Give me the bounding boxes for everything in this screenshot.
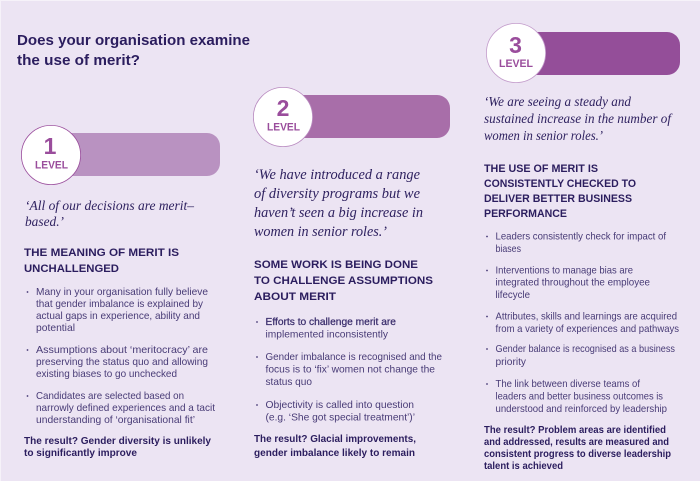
level 3 heading: PERFORMANCE: [484, 208, 567, 220]
level 3 bullet list: leaders and better business outcomes is: [496, 392, 663, 402]
level 2 heading: SOME WORK IS BEING DONE: [254, 259, 418, 271]
title: [17, 32, 250, 69]
level 2 quote: women in senior roles.’: [254, 224, 387, 240]
title: the use of merit?: [17, 52, 140, 69]
level 2 bullet list: implemented inconsistently: [266, 330, 389, 340]
level 2 bullet list: [256, 317, 442, 424]
level 2 quote: of diversity programs but we: [254, 186, 420, 202]
title: Does your organisation examine: [17, 32, 250, 49]
level 2 banner: [253, 87, 450, 147]
level 2 bullet list: focus is to ‘fix’ women not change the: [266, 364, 435, 376]
level 1 bullet list: existing biases to go unchecked: [36, 369, 177, 380]
level 3 bullet list: Leaders consistently check for impact of: [496, 232, 666, 242]
level 3 banner: LEVEL: [499, 58, 533, 70]
level 3 bullet list: understood and reinforced by leadership: [496, 404, 667, 415]
panel: level 1: [21, 125, 220, 459]
level 1 heading: UNCHALLENGED: [24, 263, 119, 275]
level 2 banner: 2: [277, 95, 289, 121]
level 2 bullet list: Efforts to challenge merit are: [266, 317, 396, 328]
level 2 banner: LEVEL: [267, 122, 300, 134]
level 1 bullet list: preserving the status quo and allowing: [36, 357, 208, 368]
level 3 result: talent is achieved: [484, 461, 563, 472]
level 1 bullet list: narrowly defined experiences and a tacit: [36, 403, 215, 414]
level 3 result: The result? Problem areas are identified: [484, 425, 666, 436]
level 1 banner: LEVEL: [35, 160, 68, 172]
level 3 quote: women in senior roles.’: [484, 129, 603, 144]
level 1 banner: 1: [44, 133, 57, 159]
level 1 result: [24, 436, 211, 459]
level 3 banner: [486, 23, 680, 83]
level 3 result: [484, 425, 671, 472]
level 3 heading: CONSISTENTLY CHECKED TO: [484, 178, 636, 190]
level 3 bullet list: integrated throughout the employee: [496, 278, 650, 288]
level 2 result: The result? Glacial improvements,: [254, 434, 416, 445]
level 3 bullet list: from a variety of experiences and pathways: [496, 324, 679, 335]
level 3 heading: DELIVER BETTER BUSINESS: [484, 193, 632, 205]
level 2 heading: ABOUT MERIT: [254, 291, 336, 303]
level 1 heading: THE MEANING OF MERIT IS: [24, 247, 179, 259]
level 3 bullet list: The link between diverse teams of: [496, 379, 640, 390]
level 3 bullet list: biases: [496, 244, 521, 255]
level 1 quote: ‘All of our decisions are merit–: [25, 199, 195, 214]
level 3 quote: [484, 95, 673, 144]
panel: level 2: [253, 87, 450, 459]
level 2 quote: ‘We have introduced a range: [254, 167, 420, 183]
level 1 quote: based.’: [25, 215, 64, 230]
level 3 result: and addressed, results are measured and: [484, 437, 669, 448]
level 2 result: gender imbalance likely to remain: [254, 448, 415, 459]
level 2 result: [254, 434, 416, 459]
level 3 heading: [484, 163, 636, 220]
level 2 quote: [254, 167, 423, 240]
level 3 bullet list: [486, 232, 679, 415]
level 3 quote: ‘We are seeing a steady and: [484, 95, 632, 110]
level 1 result: The result? Gender diversity is unlikely: [24, 436, 211, 447]
level 1 quote: [25, 199, 195, 230]
level 2 bullet list: Gender imbalance is recognised and the: [266, 352, 442, 363]
level 1 banner: [21, 125, 220, 185]
level 1 bullet list: that gender imbalance is explained by: [36, 299, 204, 310]
level 3 heading: THE USE OF MERIT IS: [484, 163, 598, 175]
level 1 bullet list: [27, 287, 215, 426]
level 3 banner: 3: [509, 32, 522, 58]
level 3 bullet list: Attributes, skills and learnings are acquired: [496, 312, 677, 322]
level 2 quote: haven’t seen a big increase in: [254, 205, 423, 221]
level 3 quote: sustained increase in the number of: [484, 112, 673, 127]
level 1 result: to significantly improve: [24, 448, 137, 459]
level 2 bullet list: Objectivity is called into question: [266, 400, 414, 411]
level 1 bullet list: actual gaps in experience, ability and: [36, 311, 200, 322]
level 2 bullet list: (e.g. ‘She got special treatment’)’: [266, 412, 415, 424]
level 2 heading: TO CHALLENGE ASSUMPTIONS: [254, 275, 433, 287]
level 1 heading: [24, 247, 179, 275]
level 3 bullet list: Gender balance is recognised as a business: [496, 344, 675, 355]
level 3 bullet list: lifecycle: [496, 290, 530, 301]
level 2 bullet list: status quo: [266, 377, 312, 388]
level 2 heading: [254, 259, 433, 303]
level 3 result: consistent progress to diverse leadership: [484, 449, 671, 460]
level 1 bullet list: Candidates are selected based on: [36, 391, 184, 402]
level 1 bullet list: Many in your organisation fully believe: [36, 287, 208, 298]
panel: level 3: [484, 23, 680, 472]
level 1 bullet list: potential: [36, 323, 75, 334]
level 1 bullet list: Assumptions about ‘meritocracy’ are: [36, 345, 208, 356]
level 3 bullet list: priority: [496, 357, 527, 368]
level 1 bullet list: understanding of ‘organisational fit’: [36, 415, 195, 426]
level 3 bullet list: Interventions to manage bias are: [496, 266, 633, 276]
